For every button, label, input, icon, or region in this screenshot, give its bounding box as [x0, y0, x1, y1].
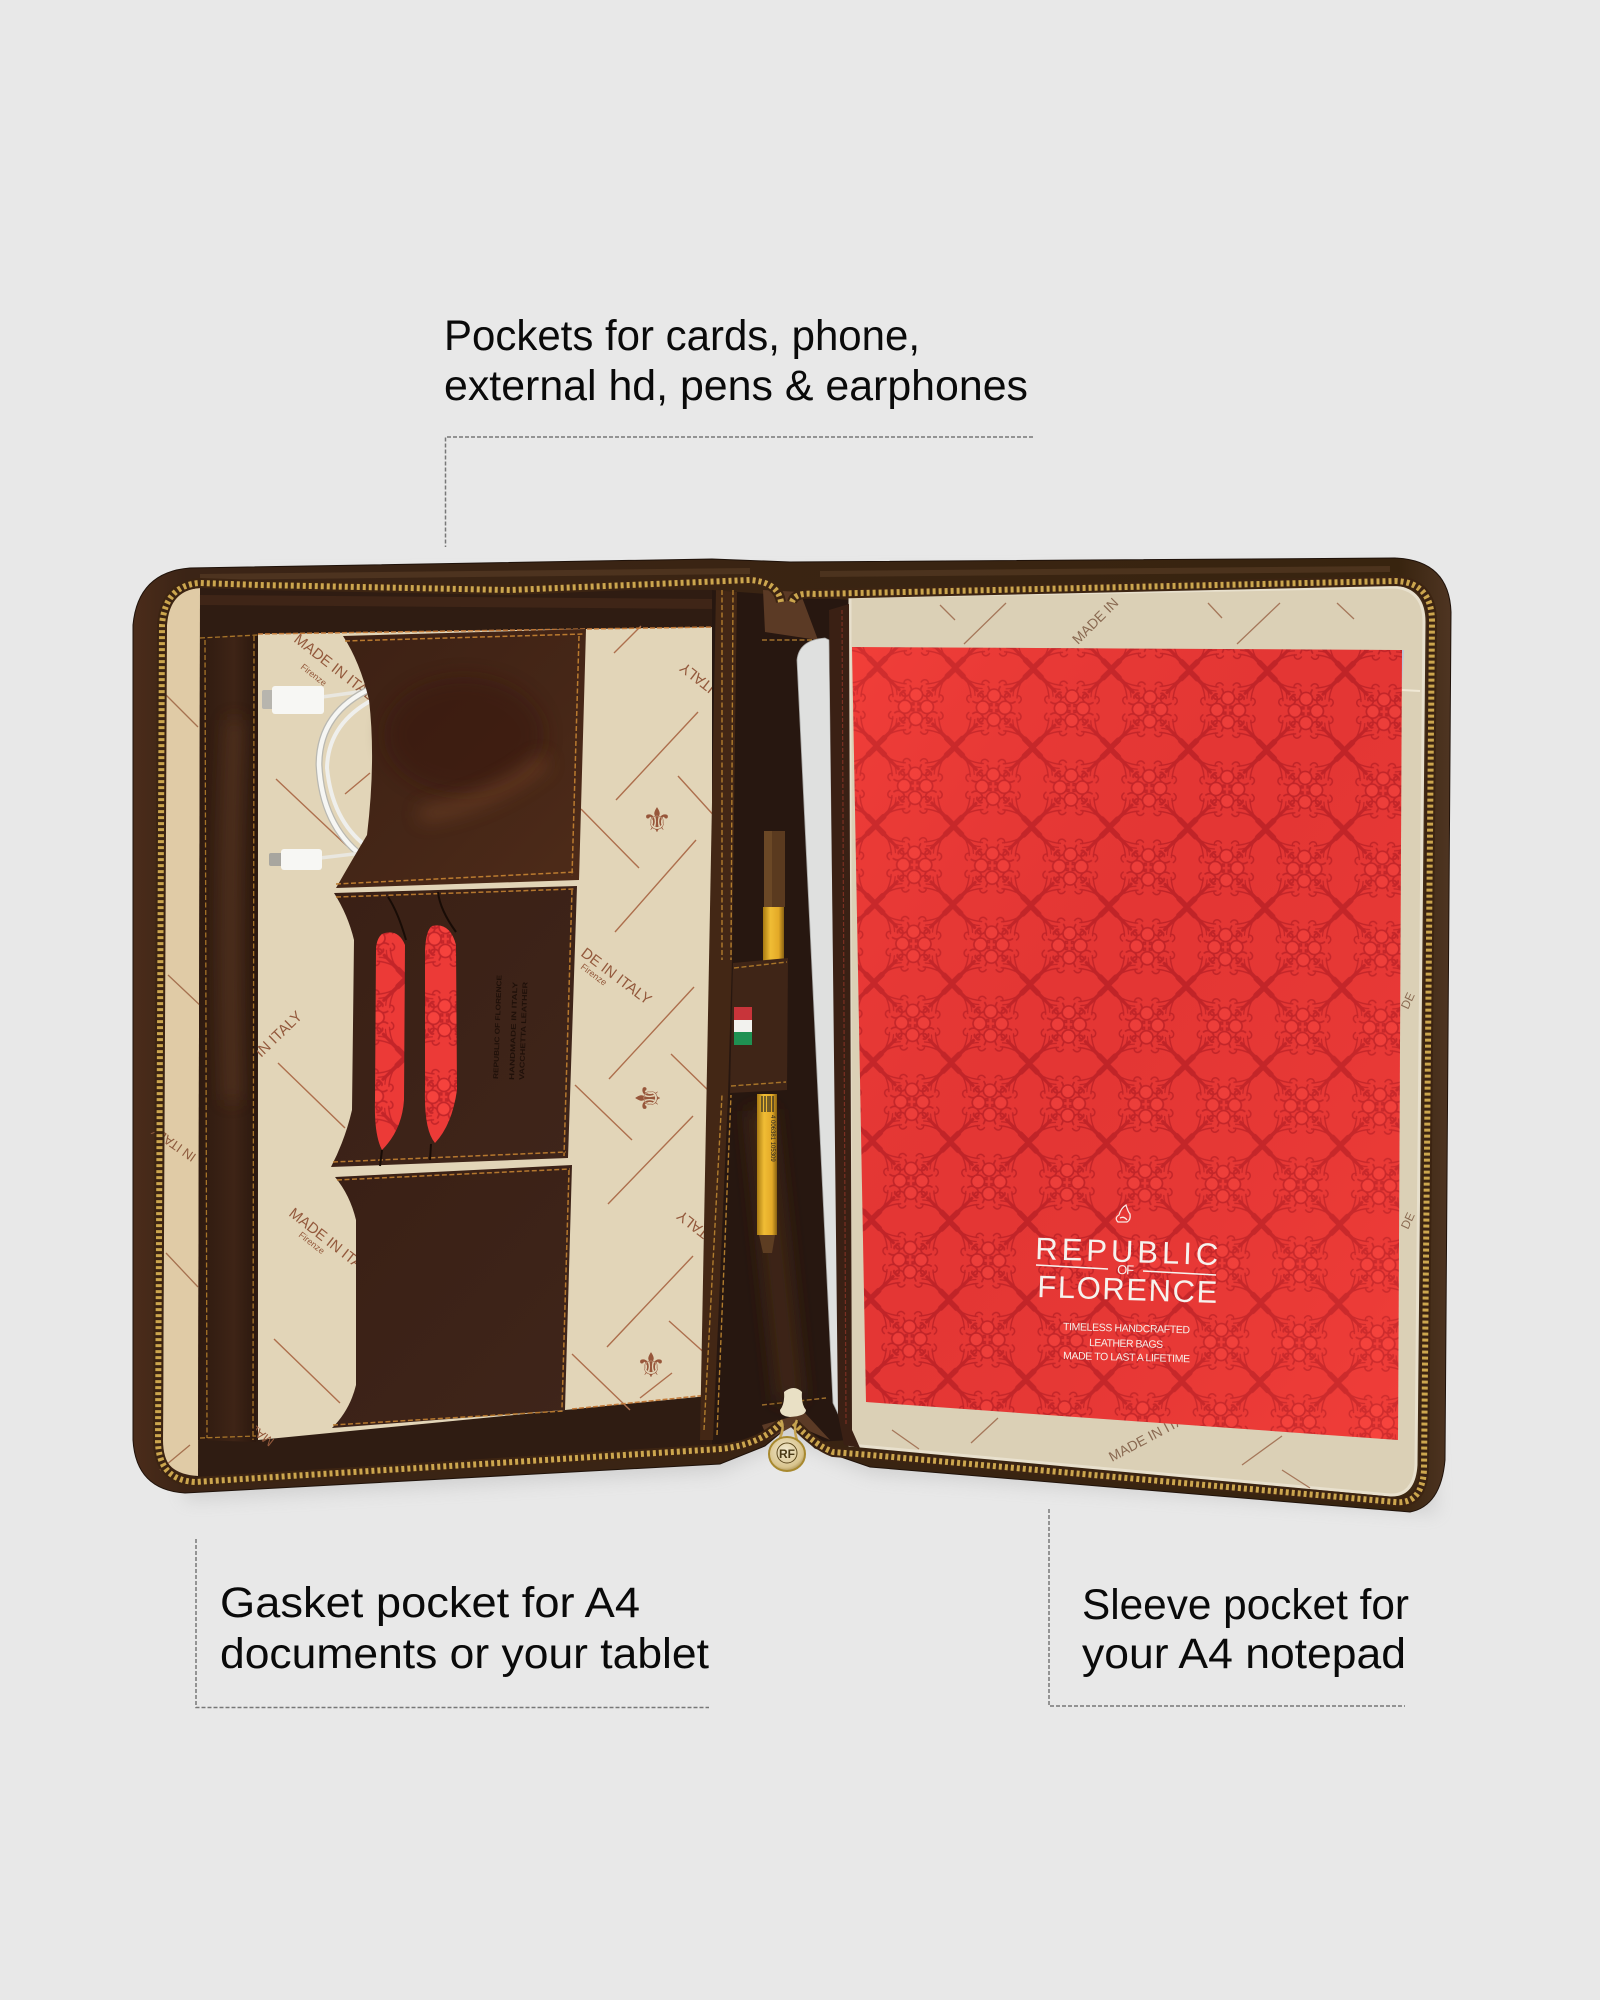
brand logo: republic of florence: FLORENCE — [1037, 1269, 1218, 1310]
made in italy marks: Firenze — [297, 1230, 327, 1256]
red notepad showing through slot two — [425, 925, 457, 1143]
made in italy marks: MADE — [238, 1414, 277, 1449]
callout: gasket pocket for A4 documents or your tablet: documents or your tablet — [220, 1630, 709, 1678]
callout: sleeve pocket for your A4 notepad: your A4 notepad — [1082, 1630, 1406, 1678]
tablet or document in gasket pocket — [797, 638, 840, 1418]
zipper pull with RF coin: RF — [779, 1447, 795, 1461]
made in italy marks: MADE IN ITALY — [291, 631, 385, 709]
callout: pockets for cards, phone, external hd, pens and earphones: Pockets for cards, phone, — [444, 312, 920, 360]
left panel: beige side strip — [148, 588, 203, 1476]
left panel: printed beige lining — [238, 626, 719, 1449]
made in italy marks: MADE IN ITALY — [1106, 1404, 1201, 1465]
embossed brand text: VACCHETTA LEATHER — [519, 982, 529, 1080]
made in italy marks: ITALY — [677, 659, 718, 696]
fleur-de-lis marks — [629, 801, 672, 1386]
pen: yellow felt tip — [757, 831, 785, 1253]
brand tagline — [1063, 1321, 1191, 1365]
made in italy marks: MADE IN ITALY — [286, 1205, 380, 1283]
callout: sleeve pocket for your A4 notepad — [1049, 1509, 1409, 1706]
fleur-de-lis marks: ⚜ — [636, 1346, 666, 1386]
red notepad — [852, 647, 1402, 1440]
icon: white usb cable — [262, 686, 372, 870]
made in italy marks: DE — [1398, 990, 1418, 1011]
zipper: left panel — [158, 580, 781, 1482]
pocket: card slots — [331, 886, 577, 1167]
callout: pockets for cards, phone, external hd, pens and earphones: external hd, pens & earphones — [444, 362, 1028, 410]
brand logo: republic of florence: OF — [1117, 1262, 1134, 1278]
made in italy marks: ITALY — [674, 1207, 715, 1244]
made in italy marks: MADE IN — [1069, 595, 1121, 647]
callout: pockets for cards, phone, external hd, pens and earphones — [444, 312, 1033, 547]
right panel: beige sleeve lining — [850, 587, 1424, 1495]
portfolio: open leather case — [133, 558, 1451, 1512]
pocket: gasket document pocket — [332, 1165, 572, 1428]
brand tagline: LEATHER BAGS — [1089, 1337, 1163, 1351]
fleur-de-lis marks: ⚜ — [642, 801, 672, 841]
made in italy marks — [1069, 595, 1418, 1465]
zipper: right panel — [792, 581, 1432, 1502]
made in italy marks: Firenze — [299, 662, 329, 688]
made in italy marks: DE IN ITALY — [578, 945, 655, 1009]
callout: gasket pocket for A4 documents or your tablet — [196, 1539, 709, 1708]
callout: gasket pocket for A4 documents or your tablet: Gasket pocket for A4 — [220, 1579, 640, 1627]
icon: italian flag label — [734, 1007, 752, 1045]
made in italy marks: IN ITALY — [252, 1008, 306, 1061]
left panel: dark inner lining — [195, 588, 717, 1478]
made in italy marks: Firenze — [579, 962, 609, 988]
red notepad showing through slot one — [375, 932, 405, 1150]
left panel: beige side strip: IN ITALY — [148, 1123, 199, 1165]
embossed brand text: REPUBLIC OF FLORENCE — [493, 974, 504, 1079]
left panel: vertical leather strip — [198, 634, 258, 1442]
callout: sleeve pocket for your A4 notepad: Sleeve pocket for — [1082, 1581, 1409, 1629]
leather outer shell — [133, 558, 1451, 1512]
made in italy marks: DE — [1398, 1210, 1418, 1231]
made in italy marks — [238, 631, 718, 1449]
right panel: inner leather binding — [829, 604, 860, 1448]
icon: brand griffin emblem — [1116, 1205, 1130, 1222]
portfolio shadow — [185, 570, 1436, 1513]
brand tagline: MADE TO LAST A LIFETIME — [1063, 1350, 1190, 1365]
zipper pull with RF coin — [769, 1388, 806, 1471]
brand logo: republic of florence: REPUBLIC — [1035, 1231, 1219, 1272]
pen: yellow felt tip: 4 006381 105309 — [769, 1115, 775, 1162]
paper edge behind notepad — [1399, 650, 1404, 700]
embossed brand text — [493, 974, 529, 1080]
brand tagline: TIMELESS HANDCRAFTED — [1063, 1321, 1191, 1336]
pen holder loop with italian flag — [730, 958, 788, 1093]
fleur-de-lis marks: ⚜ — [629, 1083, 669, 1113]
embossed brand text: HANDMADE IN ITALY — [509, 981, 519, 1080]
spine: inner gusset — [700, 590, 850, 1452]
pocket: phone pocket — [336, 629, 586, 888]
brand logo: republic of florence — [1035, 1231, 1219, 1310]
